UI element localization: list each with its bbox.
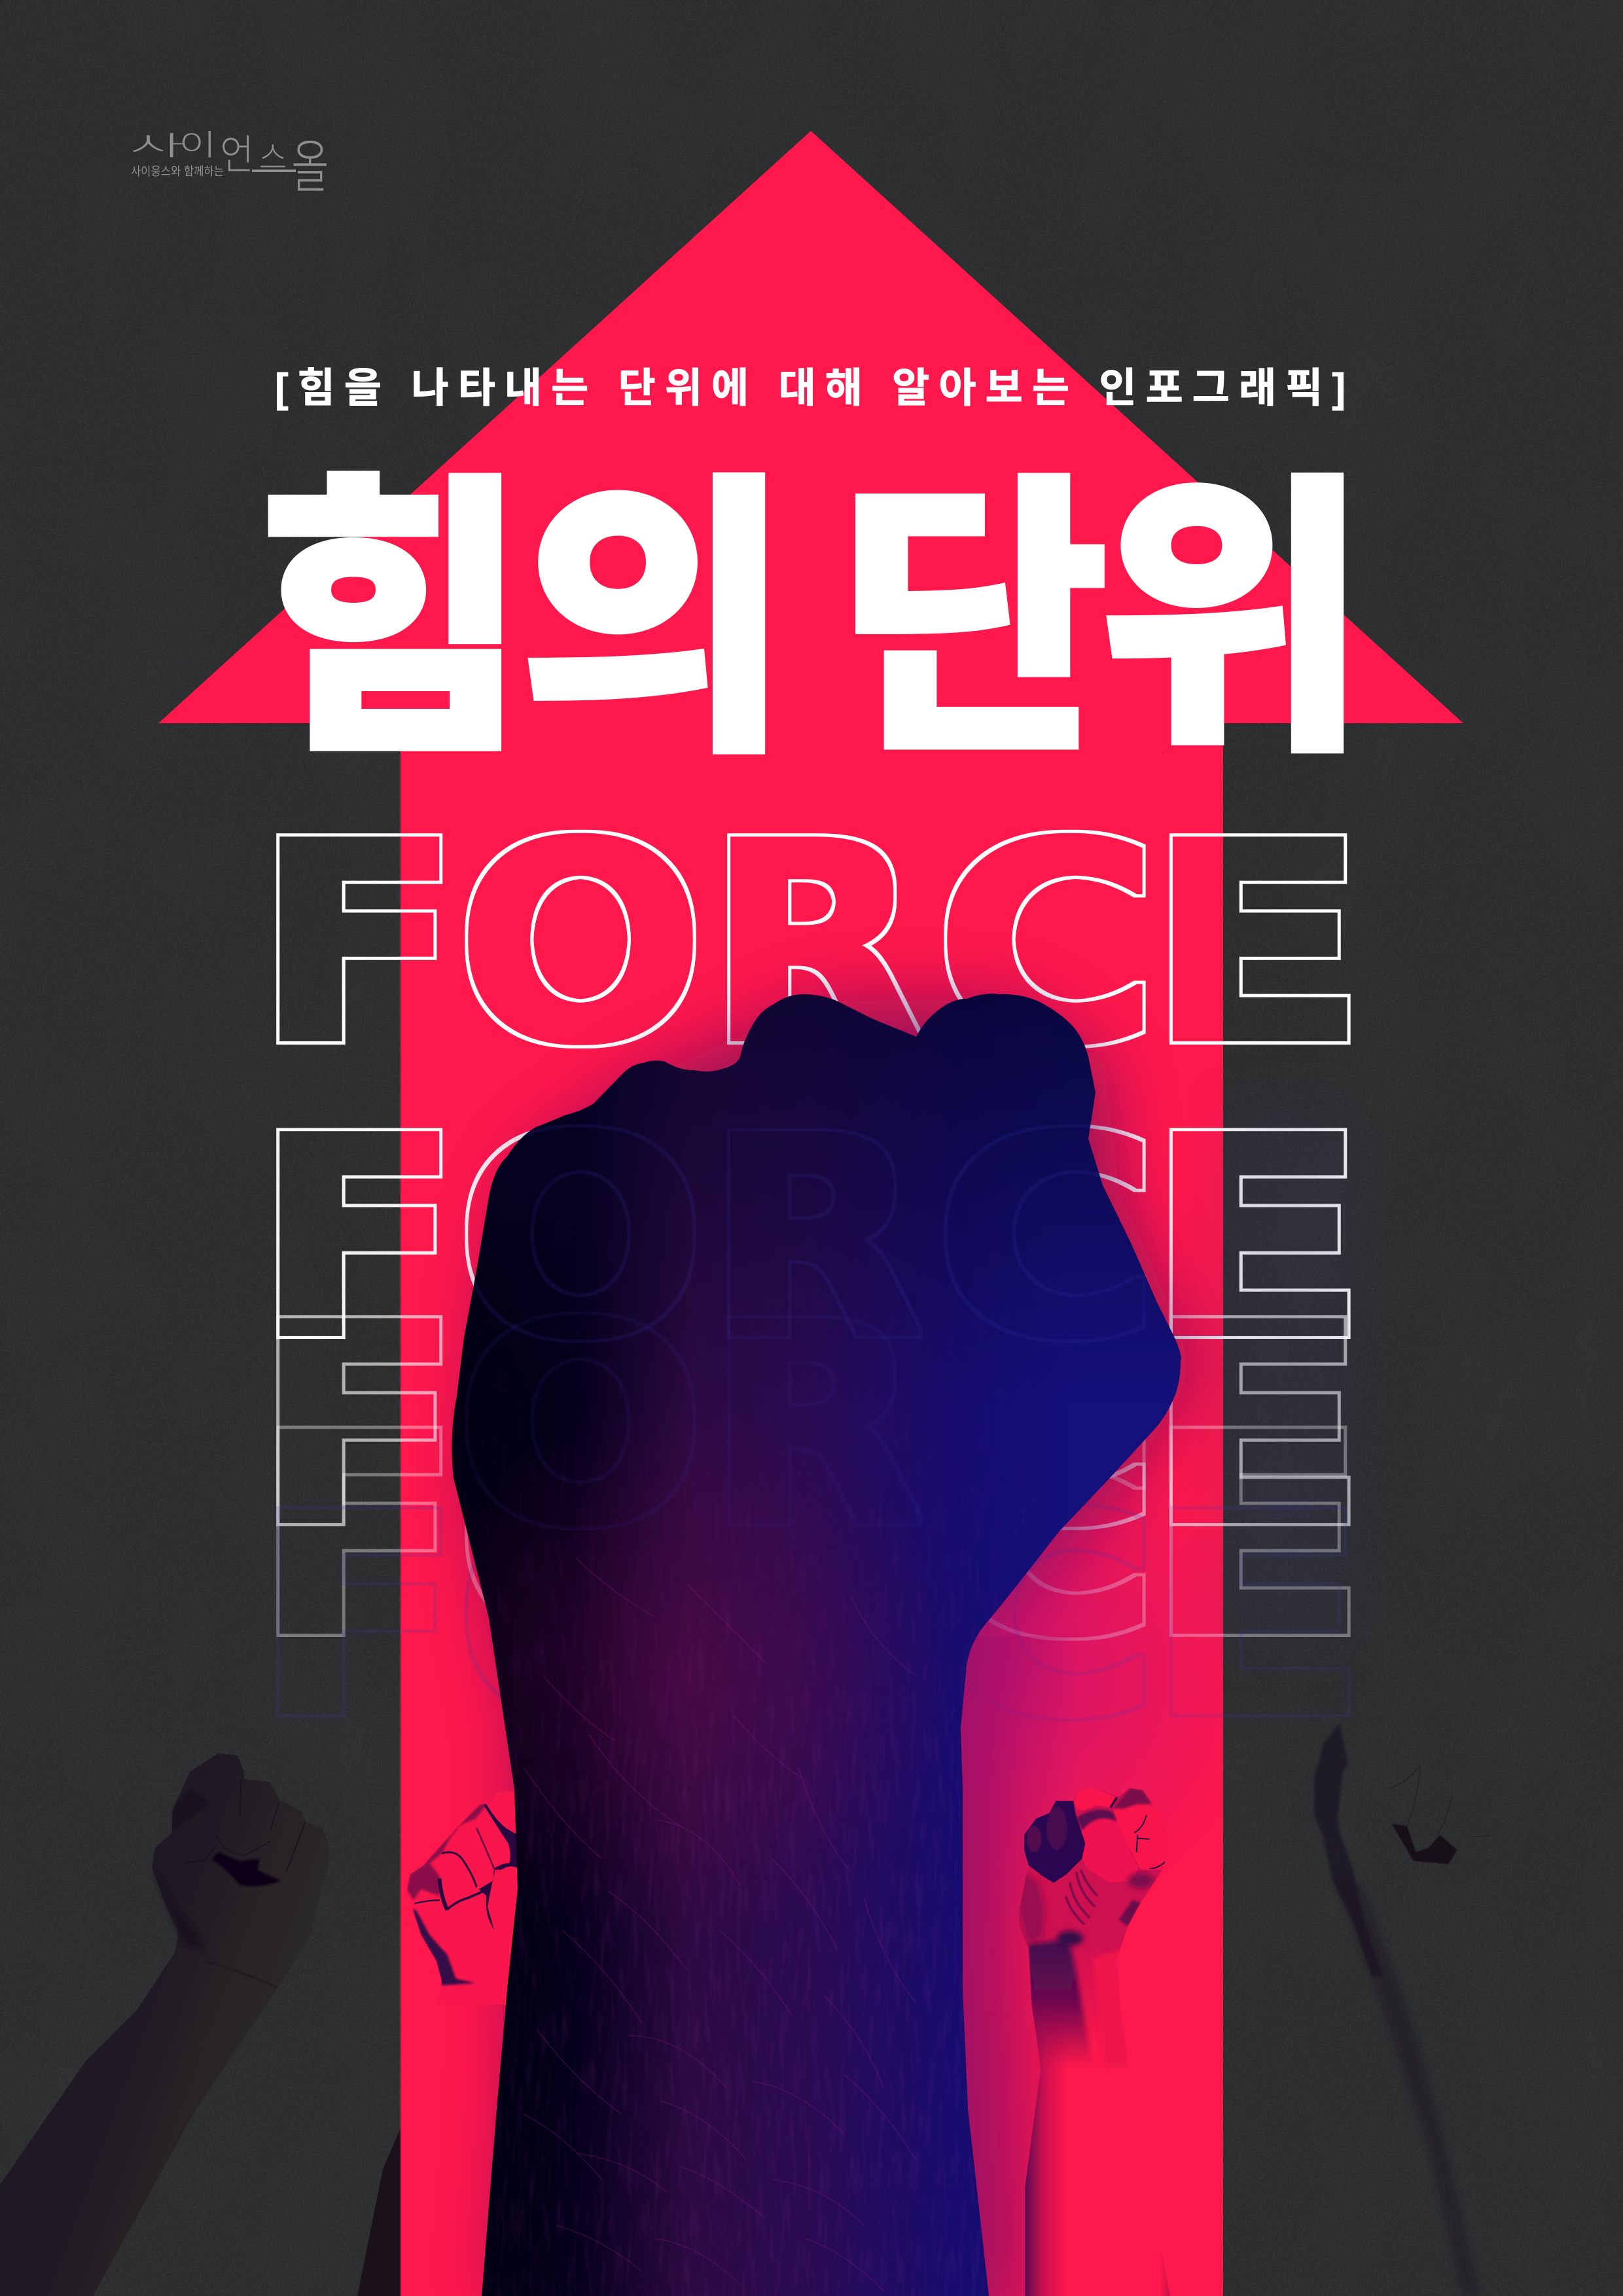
FORCE outline row 1: R (707, 785, 922, 1103)
hair strokes (524, 1558, 916, 2291)
FORCE outline row 2: R (707, 1079, 922, 1398)
FORCE outline row 5: F (254, 1458, 462, 1776)
FORCE outline row 2: C (935, 1079, 1160, 1398)
FORCE outline row 4: R (707, 1377, 922, 1696)
red arrow (158, 131, 1463, 2296)
right inner hand (1001, 1780, 1185, 2070)
FORCE outline row 1 (254, 785, 1368, 1103)
right inner arm (1001, 1780, 1185, 2296)
title: 힘 (257, 383, 528, 808)
FORCE outline row 5: R (707, 1458, 922, 1776)
glow behind fist (401, 1001, 1347, 2296)
FORCE outline row 3: E (1145, 1266, 1368, 1585)
FORCE outline row 1: F (254, 785, 462, 1103)
left outer arm (0, 1753, 329, 2296)
FORCE outline row 3 (254, 1266, 1368, 1585)
FORCE outline row 4 (254, 1377, 1368, 1696)
FORCE outline row 2: F (254, 1080, 462, 1398)
logo: 이 (179, 121, 217, 164)
logo: 언 (220, 122, 254, 181)
logo: 올 (291, 121, 329, 204)
logo: 사이웅스와 함께하는 (131, 165, 224, 178)
FORCE outline row 4: C (935, 1377, 1160, 1696)
title (257, 383, 1368, 808)
title: 의 (519, 383, 790, 808)
ghost FORCE row inside fist (456, 1079, 1160, 1398)
logo: 사 (130, 124, 185, 163)
FORCE outline row 1: E (1145, 785, 1368, 1103)
logo (130, 121, 329, 204)
FORCE outline row 4: E (1145, 1377, 1368, 1696)
ghost FORCE row inside fist: O (456, 1080, 705, 1398)
logo: 스 (259, 131, 287, 178)
FORCE outline row 2 (254, 1079, 1368, 1398)
FORCE outline row 2: O (456, 1080, 705, 1398)
FORCE outline row 5: O (456, 1458, 705, 1776)
title: 위 (1097, 383, 1368, 808)
FORCE outline row 3: O (456, 1267, 705, 1585)
FORCE outline row 3: C (935, 1266, 1160, 1585)
ghost FORCE lower row inside fist: R (707, 1266, 922, 1585)
ghost FORCE row inside fist: R (707, 1079, 922, 1398)
right outer arm (1314, 1723, 1490, 2296)
FORCE outline row 2: E (1145, 1079, 1368, 1398)
big fist (445, 982, 1191, 2296)
ghost FORCE lower row inside fist: O (456, 1267, 705, 1585)
ghost FORCE lower row inside fist (456, 1266, 922, 1585)
FORCE outline row 4: F (254, 1378, 462, 1696)
FORCE outline row 3: F (254, 1267, 462, 1585)
FORCE outline row 5: C (935, 1458, 1160, 1776)
left inner arm (357, 1785, 524, 2296)
FORCE outline row 1: O (456, 785, 705, 1103)
FORCE outline row 4: O (456, 1378, 705, 1696)
FORCE outline row 3: R (707, 1266, 922, 1585)
FORCE outline row 5 (254, 1458, 1368, 1776)
FORCE outline row 1: C (935, 785, 1160, 1103)
ghost FORCE row inside fist: C (935, 1079, 1160, 1398)
FORCE outline row 5: E (1145, 1458, 1368, 1776)
left inner hand (393, 1785, 524, 2005)
title: 단 (838, 383, 1109, 808)
subtitle: [힘을 나타내는 단위에 대해 알아보는 인포그래픽] (275, 366, 1346, 411)
